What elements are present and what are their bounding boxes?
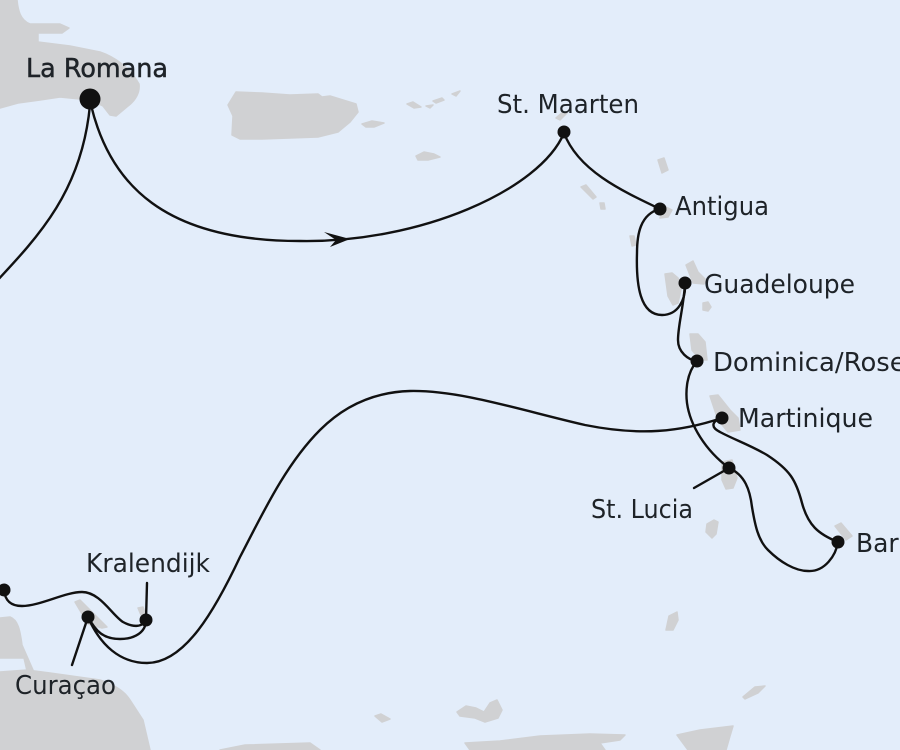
marker: Aruba [0,584,10,596]
land: St. Vincent [706,520,718,538]
land: coast bottom [220,743,320,750]
arrow [324,232,350,247]
marker: Martinique [716,412,728,424]
marker: St. Maarten [558,126,570,138]
land: Tobago [743,686,765,699]
land: Marie-Galante [703,302,711,311]
cruise route line [0,105,838,665]
land: Virgin Islands [407,91,460,108]
label: St. Maarten: St. Maarten [497,90,639,120]
marker: Antigua [654,202,666,216]
land: Guadeloupe [665,261,706,305]
land: Dominica [690,334,707,360]
land: St. Croix [416,152,440,160]
marker: La Romana [80,88,100,110]
label: Guadeloupe: Guadeloupe [704,270,855,300]
land: small island [375,714,390,722]
label: Kralendijk: Kralendijk [86,549,210,579]
marker: Kralendijk [140,614,152,626]
land: Martinique [710,395,740,432]
land: Paraguaná peninsula [0,617,33,671]
land: Trinidad [677,726,733,750]
label: St. Lucia: St. Lucia [591,495,693,525]
label: Curaçao: Curaçao [15,671,116,701]
land: Barbados [835,523,852,540]
land: Montserrat [630,236,636,246]
land: Barbuda [658,158,668,173]
land: St. Maarten [556,112,567,120]
land: Bonaire [138,607,146,615]
land: Hispaniola [0,0,139,116]
label: Martinique: Martinique [738,404,873,434]
land: Antigua [660,206,672,218]
marker: St. Lucia [722,462,736,474]
land: Vieques [362,121,384,127]
land: Grenada [666,612,678,630]
marker: Curaçao [82,610,94,624]
label: Antigua: Antigua [675,192,769,222]
land: Curaçao [75,600,107,628]
marker: Dominica [690,354,704,368]
land: Margarita [457,700,502,722]
port markers [0,88,844,626]
marker: Barbados [832,536,844,548]
land: Venezuela coast west [0,670,150,750]
label: La Romana: La Romana [26,54,168,84]
land: Venezuela coast [465,734,625,750]
marker: Guadeloupe [678,276,692,290]
land: St. Lucia [722,460,737,489]
land: St. Kitts and Nevis [581,185,605,209]
land: Puerto Rico [228,92,358,139]
